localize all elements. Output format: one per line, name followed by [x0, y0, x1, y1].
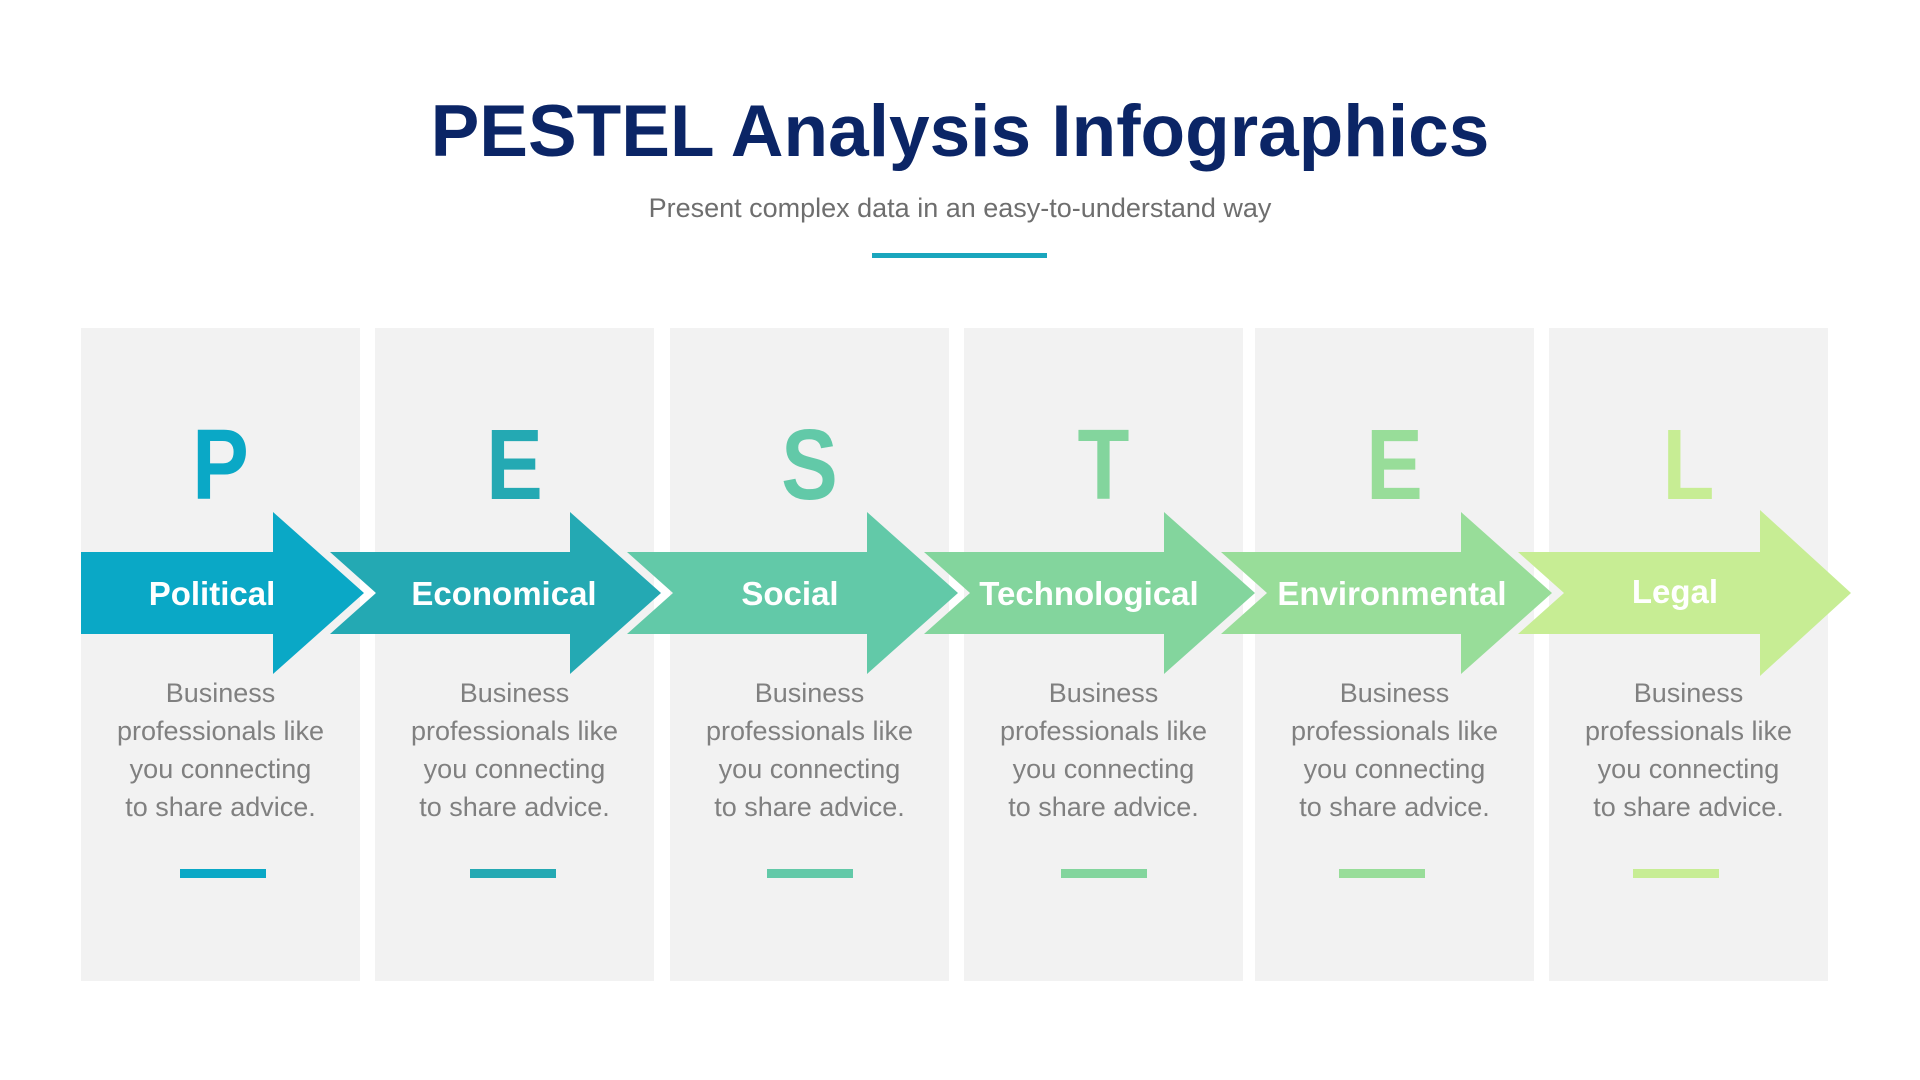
- panel: technological: T: [1078, 409, 1129, 521]
- subtitle: Present complex data in an easy-to-understand way: [649, 193, 1271, 223]
- panel: economical: Business: [460, 678, 569, 708]
- panel: environmental: you connecting: [1304, 754, 1485, 784]
- panel: environmental: E: [1366, 409, 1423, 521]
- title underline: [872, 253, 1047, 258]
- panel: political: professionals like: [117, 716, 324, 746]
- arrow: political: [81, 512, 364, 674]
- panel: social: [670, 328, 949, 981]
- panel: social: professionals like: [706, 716, 913, 746]
- panel: social: you connecting: [719, 754, 900, 784]
- panel: political: P: [192, 409, 249, 521]
- panel: legal: professionals like: [1585, 716, 1792, 746]
- panel: technological: professionals like: [1000, 716, 1207, 746]
- arrow: technological: Technological: [979, 575, 1199, 612]
- panel: social: Business: [755, 678, 864, 708]
- panel: legal: you connecting: [1598, 754, 1779, 784]
- panel: legal: Business: [1634, 678, 1743, 708]
- panel: environmental: professionals like: [1291, 716, 1498, 746]
- title: PESTEL Analysis Infographics: [431, 91, 1489, 172]
- arrow: social: [627, 512, 958, 674]
- panel: economical: you connecting: [424, 754, 605, 784]
- panel: economical: E: [486, 409, 543, 521]
- panel: technological: you connecting: [1013, 754, 1194, 784]
- panel: political: to share advice.: [125, 792, 316, 822]
- arrow: political: Political: [149, 575, 275, 612]
- arrow: legal: Legal: [1632, 573, 1718, 610]
- panel: legal: [1549, 328, 1828, 981]
- panel: technological: to share advice.: [1008, 792, 1199, 822]
- panel: technological: Business: [1049, 678, 1158, 708]
- panel: legal: L: [1663, 409, 1714, 521]
- arrow: social: Social: [741, 575, 839, 612]
- panel: economical: [375, 328, 654, 981]
- panel: political: [81, 328, 360, 981]
- panel: economical: professionals like: [411, 716, 618, 746]
- arrow: technological: [924, 512, 1255, 674]
- arrow: environmental: Environmental: [1277, 575, 1507, 612]
- panel: environmental: [1255, 328, 1534, 981]
- panel: legal: to share advice.: [1593, 792, 1784, 822]
- arrow: environmental: [1221, 512, 1552, 674]
- arrow: economical: Economical: [411, 575, 597, 612]
- arrow: economical: [330, 512, 661, 674]
- panel: environmental: Business: [1340, 678, 1449, 708]
- panel: technological: [964, 328, 1243, 981]
- panel: environmental: to share advice.: [1299, 792, 1490, 822]
- panel: political: you connecting: [130, 754, 311, 784]
- arrow: legal: [1518, 510, 1851, 676]
- panel: political: Business: [166, 678, 275, 708]
- panel: social: S: [781, 409, 838, 521]
- panel: economical: to share advice.: [419, 792, 610, 822]
- panel: social: to share advice.: [714, 792, 905, 822]
